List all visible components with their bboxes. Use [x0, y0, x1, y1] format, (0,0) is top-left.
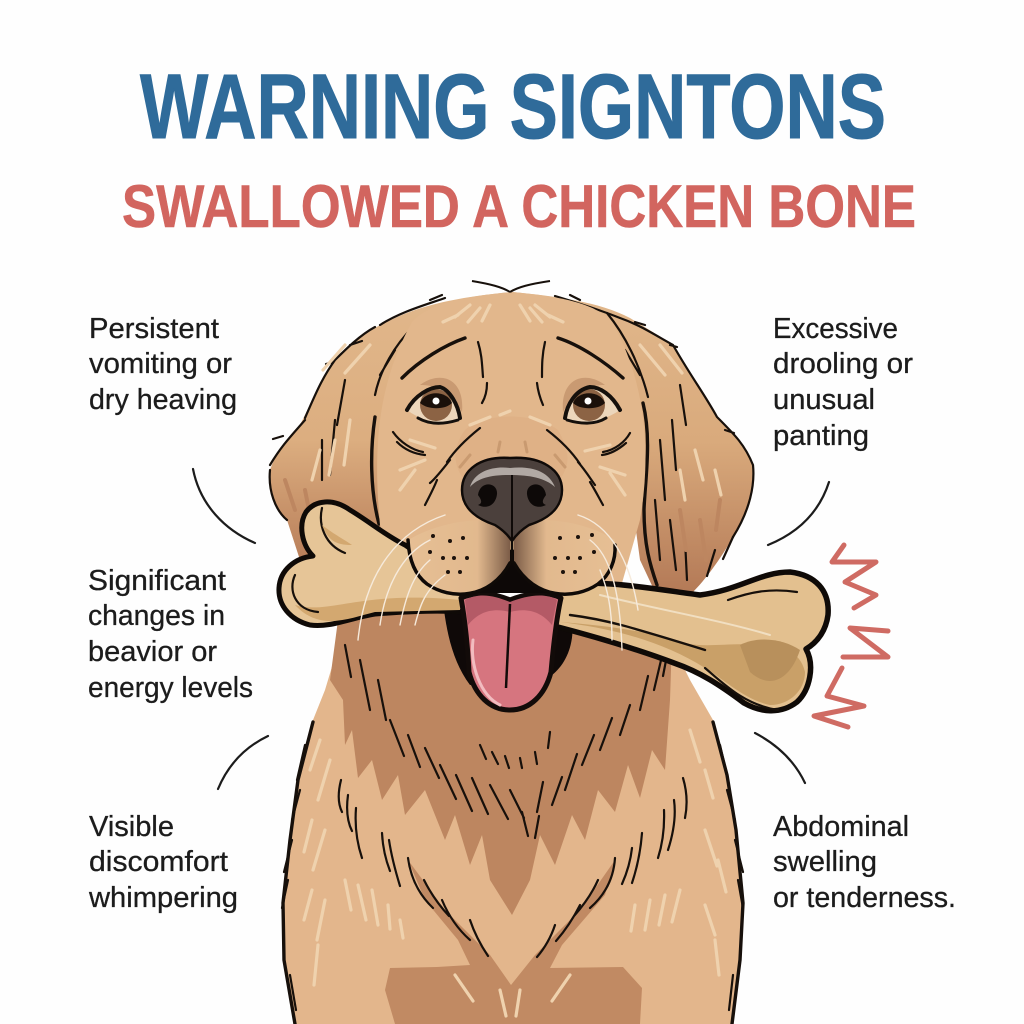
- label: behavior changes: Significant: [88, 565, 226, 597]
- label: behavior changes: [88, 565, 253, 704]
- label: visible discomfort: Visible: [89, 811, 174, 843]
- illustration: chicken bone: [279, 502, 828, 711]
- icon: red pain zigzag: [814, 545, 888, 727]
- illustration: whiskers: [358, 515, 638, 650]
- neck fur strokes: [345, 645, 668, 838]
- illustration: dog face: [377, 281, 645, 590]
- illustration: right eye: [565, 387, 620, 423]
- label: persistent vomiting: [89, 313, 237, 416]
- left end of bone: [279, 502, 470, 626]
- right end of bone: [545, 572, 828, 711]
- label: abdominal swelling: Abdominal: [773, 811, 909, 843]
- arrow: upper right curve: [768, 482, 829, 545]
- label: abdominal swelling: [773, 811, 956, 914]
- label: visible discomfort: discomfort: [89, 846, 228, 878]
- label: excessive drooling: drooling or: [773, 348, 913, 380]
- lower chest fur: [455, 975, 570, 1016]
- arrow: upper left curve: [193, 469, 255, 543]
- illustration: tongue: [461, 594, 561, 710]
- label: abdominal swelling: or tenderness.: [773, 882, 956, 914]
- side outlines: [283, 722, 313, 1024]
- label: visible discomfort: whimpering: [88, 882, 238, 914]
- arrow: lower left curve: [218, 736, 268, 789]
- label: excessive drooling: unusual: [773, 384, 875, 416]
- label: behavior changes: changes in: [88, 600, 225, 632]
- illustration: left ear: [270, 292, 512, 560]
- label: persistent vomiting: Persistent: [89, 313, 219, 345]
- chest dark fur: [330, 610, 672, 915]
- illustration: muzzle: [408, 520, 616, 594]
- illustration: dog body: [282, 610, 743, 1024]
- label: excessive drooling: Excessive: [773, 313, 898, 345]
- label: excessive drooling: [773, 313, 913, 452]
- label: behavior changes: energy levels: [88, 672, 253, 704]
- illustration: right ear: [512, 292, 753, 592]
- arrow: lower right curve: [755, 733, 805, 783]
- label: abdominal swelling: swelling: [773, 846, 877, 878]
- illustration: mouth interior: [444, 600, 573, 685]
- chevron fur strokes: [339, 780, 488, 956]
- light fur strokes: [304, 740, 403, 985]
- lower chest dark band: [385, 860, 642, 1024]
- label: excessive drooling: panting: [773, 420, 869, 452]
- label: visible discomfort: [88, 811, 238, 914]
- label: persistent vomiting: vomiting or: [89, 348, 232, 380]
- illustration: nose: [462, 458, 562, 541]
- illustration: left eye: [407, 387, 460, 423]
- label: persistent vomiting: dry heaving: [89, 384, 237, 416]
- label: behavior changes: beavior or: [88, 636, 217, 668]
- whisker dots: [428, 533, 596, 574]
